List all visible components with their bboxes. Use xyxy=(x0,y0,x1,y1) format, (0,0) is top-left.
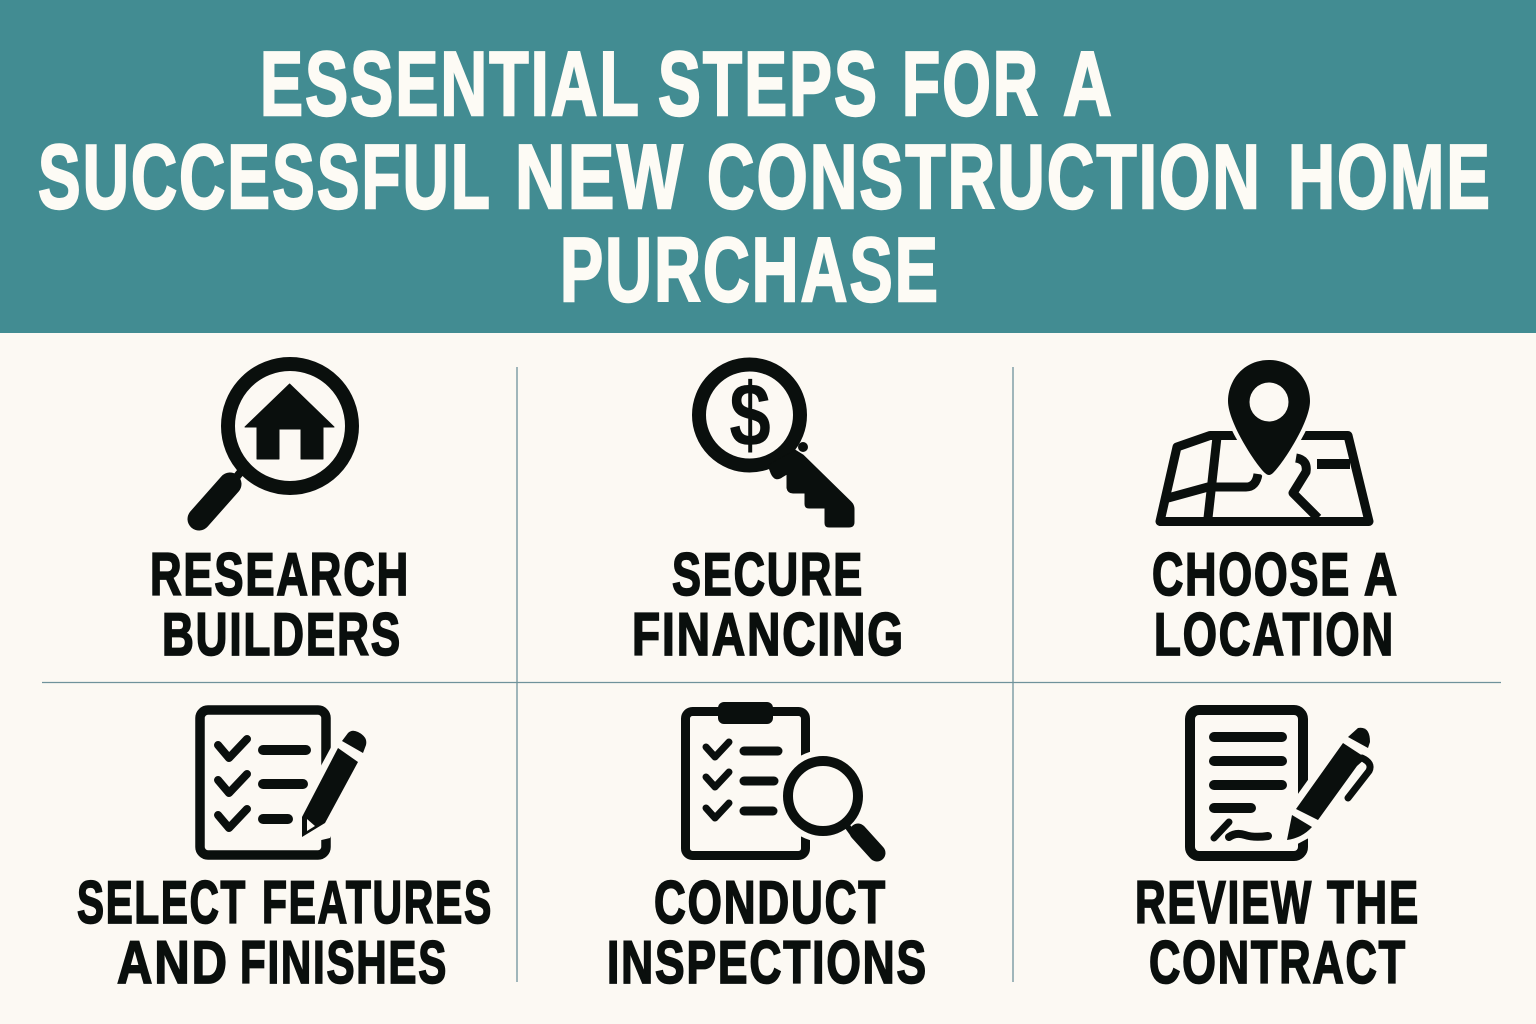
icon: magnifier with house xyxy=(199,364,352,519)
label: choose a location xyxy=(1152,540,1399,668)
label: review the contract: CONTRACT xyxy=(1149,928,1407,996)
label: select features and finishes: SELECT xyxy=(77,868,247,936)
icon: clipboard with magnifier xyxy=(686,702,877,856)
header banner xyxy=(0,0,1536,333)
label: conduct inspections xyxy=(607,868,928,996)
panel: select features and finishes xyxy=(77,710,493,996)
panel: research builders xyxy=(150,364,410,668)
title: SUCCESSFUL xyxy=(38,127,492,228)
title: STEPS xyxy=(658,34,879,135)
panel: choose a location xyxy=(1152,355,1399,668)
panel: conduct inspections xyxy=(607,702,928,996)
label: review the contract: THE xyxy=(1327,868,1420,936)
panel: review the contract xyxy=(1135,710,1420,996)
title xyxy=(38,34,1492,321)
icon: contract with pen xyxy=(1190,710,1376,856)
icon: checklist with pencil xyxy=(200,710,366,855)
label: choose a location: LOCATION xyxy=(1154,600,1395,668)
label: review the contract: REVIEW xyxy=(1135,868,1313,936)
title: PURCHASE xyxy=(560,220,940,321)
label: secure financing: SECURE xyxy=(672,540,864,608)
label: research builders: RESEARCH xyxy=(150,540,410,608)
label: conduct inspections: CONDUCT xyxy=(654,868,887,936)
label: conduct inspections: INSPECTIONS xyxy=(607,928,928,996)
label: choose a location: A xyxy=(1364,540,1399,608)
label: secure financing: FINANCING xyxy=(632,600,905,668)
label: research builders xyxy=(150,540,410,668)
label: research builders: BUILDERS xyxy=(162,600,402,668)
title: ESSENTIAL xyxy=(260,34,641,135)
title: CONSTRUCTION xyxy=(707,127,1262,228)
panel: secure financing xyxy=(632,364,905,668)
title: FOR xyxy=(902,34,1040,135)
label: select features and finishes: FEATURES xyxy=(262,868,493,936)
label: review the contract xyxy=(1135,868,1420,996)
icon: key with dollar sign xyxy=(699,364,854,527)
label: select features and finishes: FINISHES xyxy=(240,928,448,996)
icon: map with location pin xyxy=(1160,355,1369,522)
label: select features and finishes xyxy=(77,868,493,996)
icon: key with dollar sign: $ xyxy=(729,364,771,466)
label: secure financing xyxy=(632,540,905,668)
title: NEW xyxy=(515,127,685,228)
title: A xyxy=(1063,34,1114,135)
label: select features and finishes: AND xyxy=(117,928,229,996)
label: choose a location: CHOOSE xyxy=(1152,540,1351,608)
